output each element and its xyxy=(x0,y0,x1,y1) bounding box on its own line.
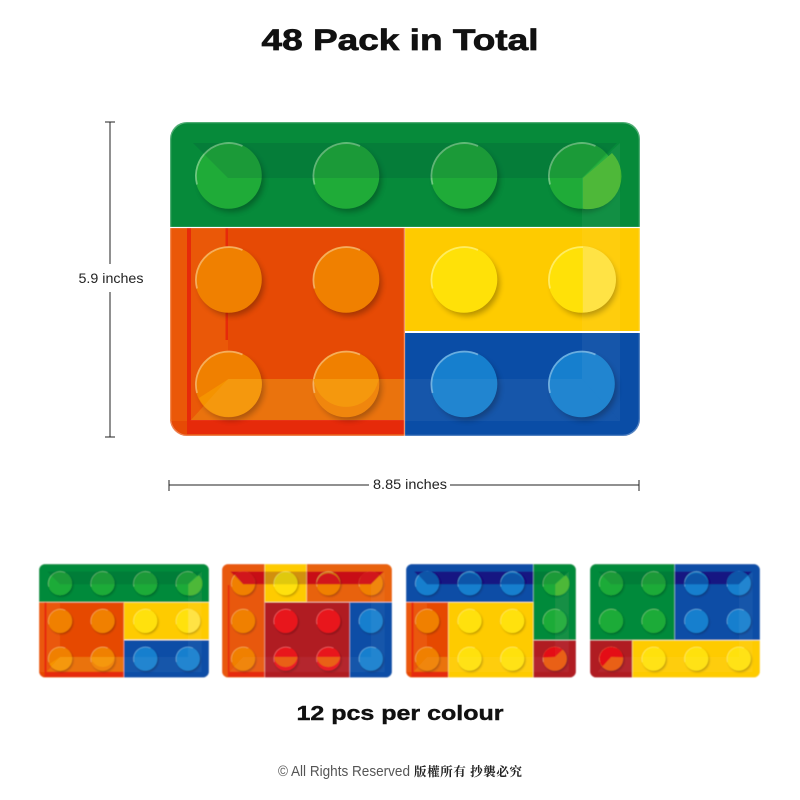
blue studs xyxy=(431,351,617,420)
height dimension arrow xyxy=(105,122,115,437)
variant plate 4: green and blue top with yellow base xyxy=(590,564,760,678)
blue brick xyxy=(405,333,640,436)
orange left panel xyxy=(170,228,228,421)
variant plate 2: orange top with dark red centre xyxy=(222,564,392,678)
orange brick xyxy=(170,228,405,436)
red tray edge xyxy=(187,228,404,434)
yellow studs xyxy=(431,246,617,316)
stud light wedges xyxy=(583,153,621,209)
title: 48 Pack in Total xyxy=(262,24,538,57)
copyright notice: © All Rights Reserved xyxy=(278,763,410,780)
orange studs xyxy=(195,246,382,420)
caption: 12 pcs per colour xyxy=(296,703,504,725)
variant plate 3: blue top with yellow centre xyxy=(406,564,576,678)
main plate xyxy=(170,122,640,436)
green brick xyxy=(170,122,640,227)
green studs xyxy=(195,142,617,212)
variant plate 1: green top xyxy=(39,564,209,678)
yellow brick xyxy=(405,228,640,331)
orange bottom band xyxy=(190,379,404,421)
height label: 5.9 inches xyxy=(78,270,144,286)
translucent tray film xyxy=(170,122,640,436)
chinese copyright notice: 版權所有 抄襲必究 xyxy=(414,764,522,779)
width label: 8.85 inches xyxy=(373,476,447,492)
brick seams xyxy=(170,228,640,436)
width dimension arrow xyxy=(169,480,639,491)
